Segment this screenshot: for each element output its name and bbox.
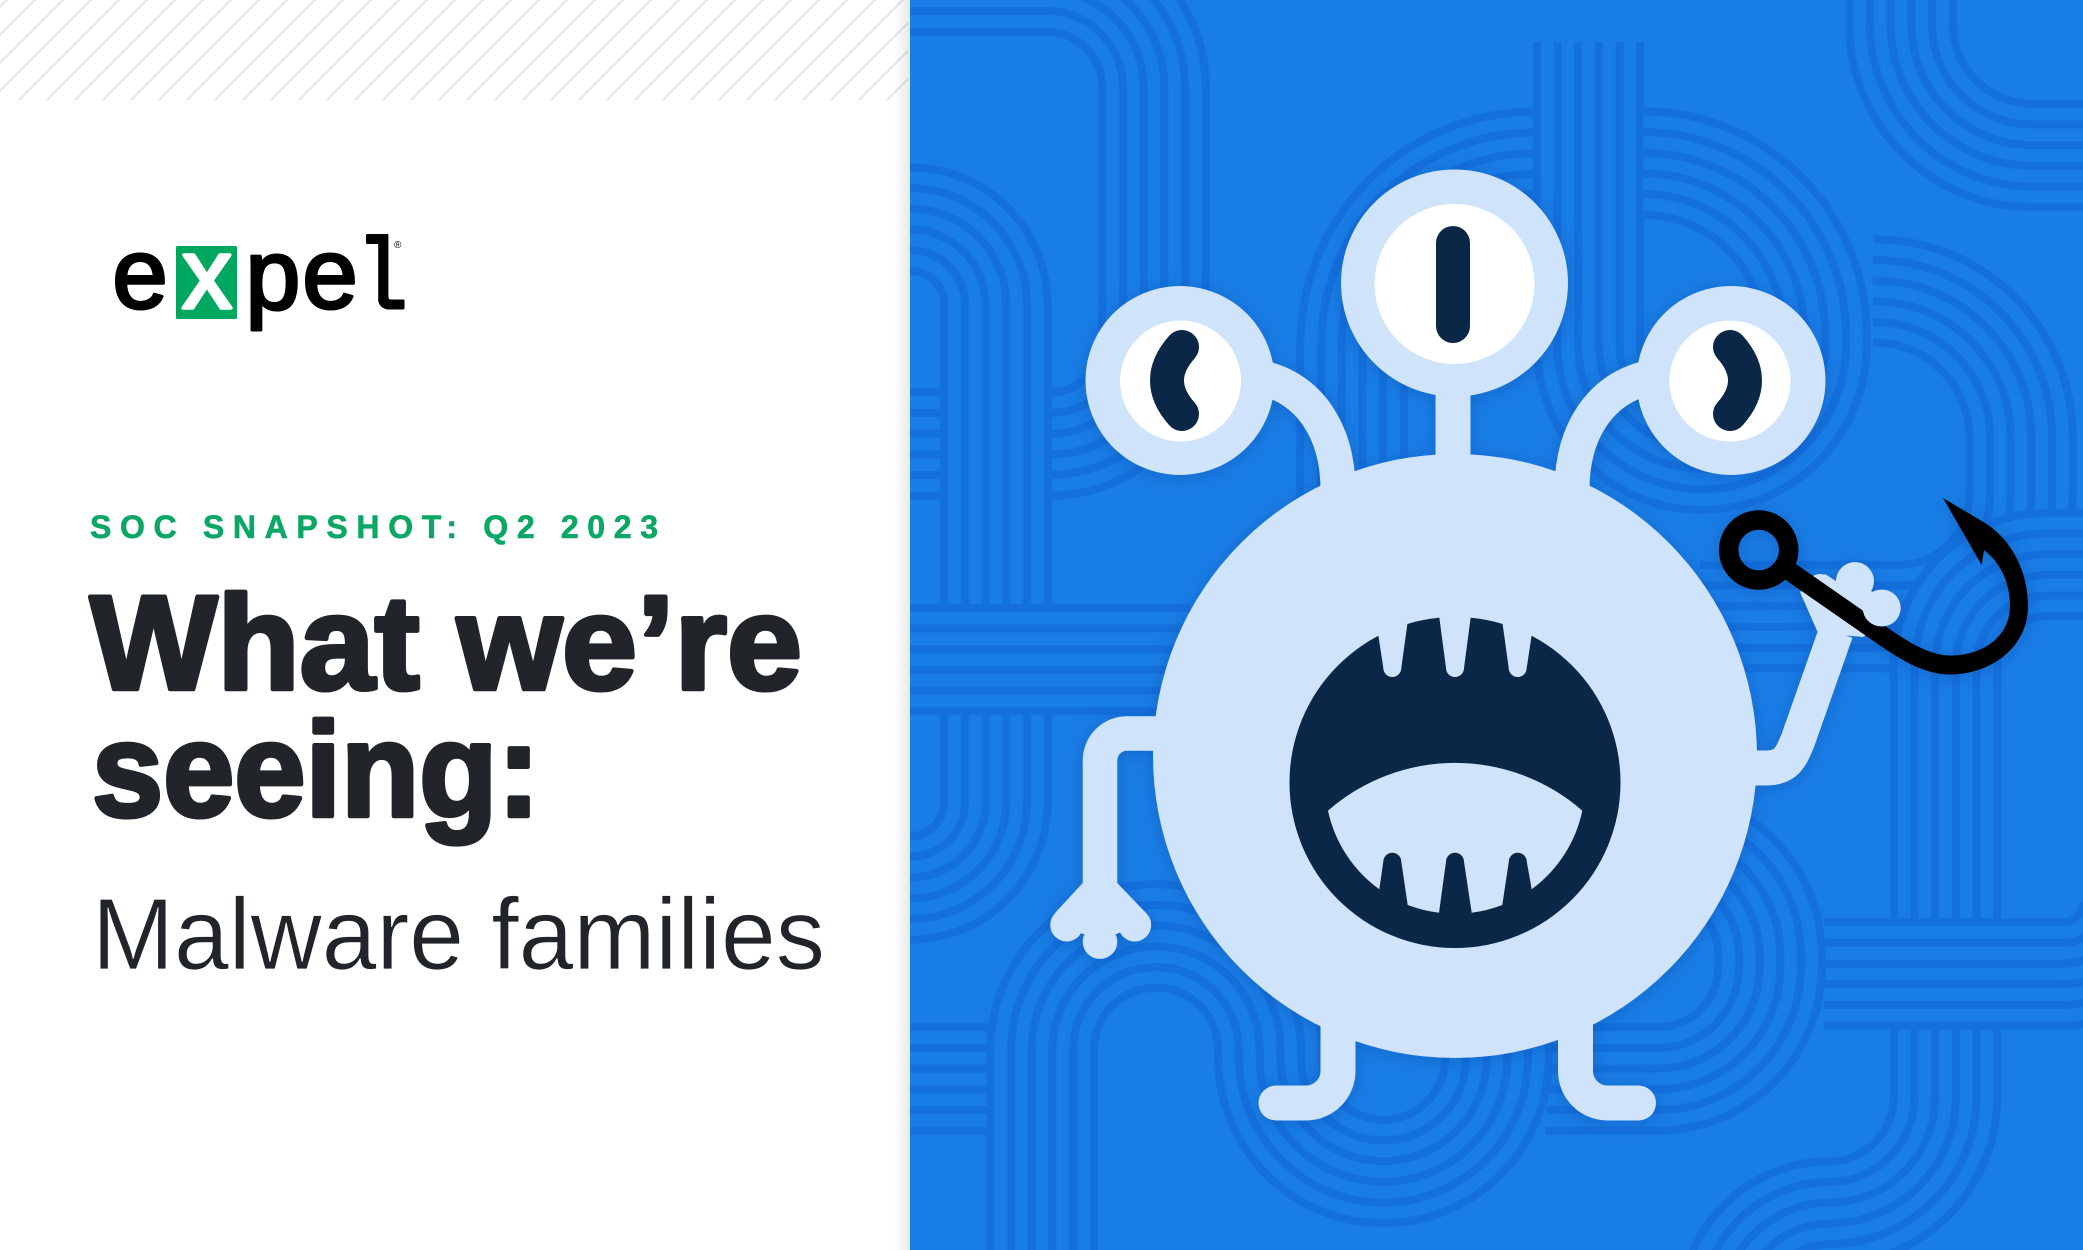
- upper teeth: [1376, 600, 1534, 677]
- left eye: [1086, 286, 1274, 475]
- logo: expel: p: [243, 227, 303, 340]
- subheading: Malware families: [92, 879, 825, 991]
- left arm and hand: [1050, 734, 1170, 959]
- monster body: [1153, 454, 1757, 1058]
- mouth: [1290, 600, 1620, 948]
- heading line one: What we’re: [90, 569, 802, 718]
- logo: expel: l: [356, 226, 408, 339]
- eye stalks: [1262, 300, 1648, 490]
- hatched top strip: [0, 0, 908, 100]
- center eye: [1341, 170, 1568, 396]
- right arm and palm: [1745, 574, 1882, 768]
- logo: expel: ®: [394, 240, 402, 251]
- lower lip and teeth: [1328, 763, 1582, 913]
- eyebrow text: SOC SNAPSHOT: Q2 2023: [90, 509, 658, 545]
- heading line two: seeing:: [92, 696, 540, 845]
- right eye: [1636, 286, 1826, 475]
- illustration: three-eyed monster holding a fishing hook: [1050, 170, 2028, 1103]
- logo: expel: x: [182, 218, 232, 330]
- logo: expel: e: [110, 226, 170, 339]
- hand fingers over the hook: [1836, 562, 1901, 626]
- logo: expel: [110, 218, 408, 340]
- logo: expel: e: [300, 226, 360, 339]
- legs: [1276, 1000, 1638, 1103]
- fishing hook: [1729, 498, 2028, 674]
- panel: blue illustration background: [905, 0, 2083, 1250]
- panel: white title panel: [0, 0, 910, 1250]
